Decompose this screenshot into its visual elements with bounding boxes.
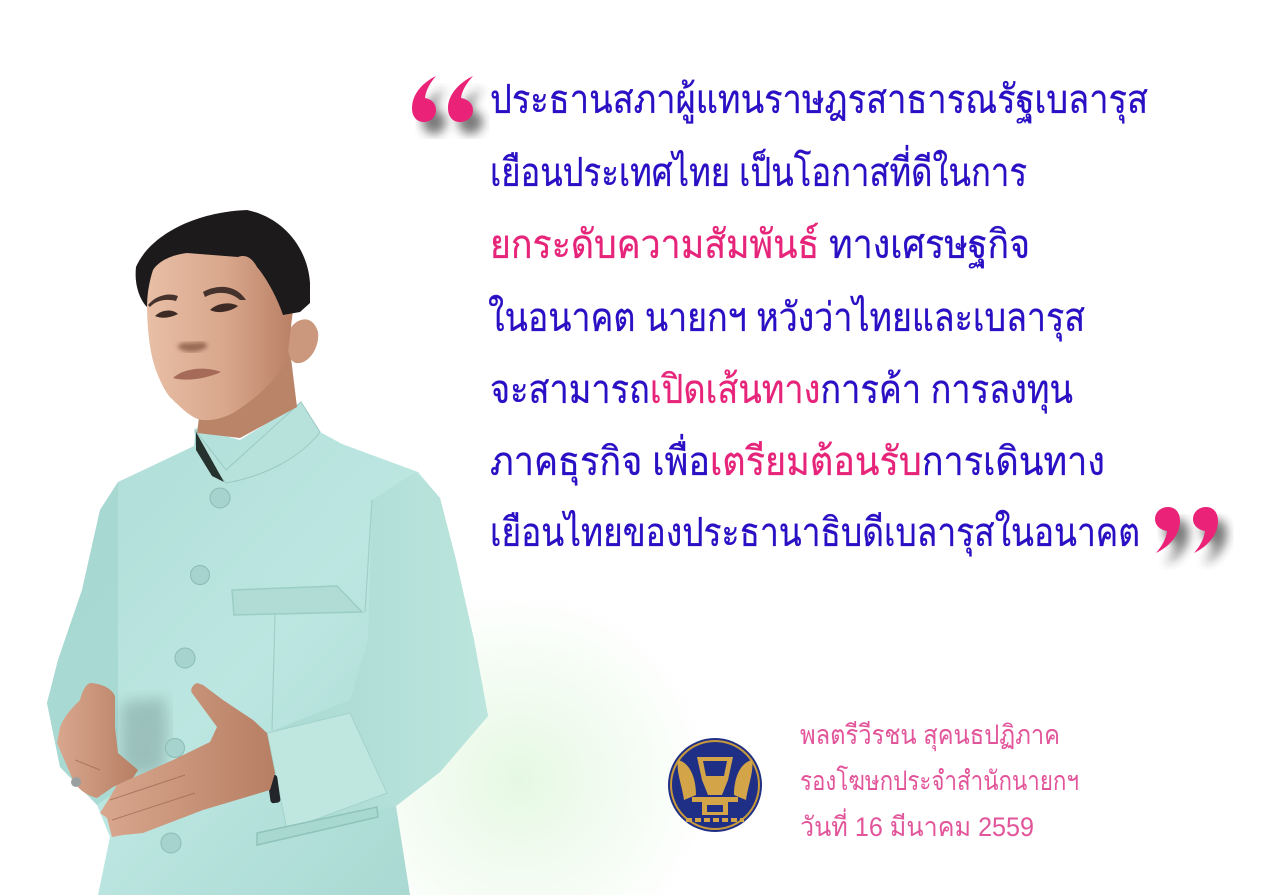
neck: [197, 350, 297, 438]
right hand: [100, 683, 275, 837]
finger lines: [75, 760, 195, 820]
ring: [71, 777, 81, 787]
nose: [177, 342, 208, 352]
collar: [195, 402, 320, 483]
ear: [287, 319, 318, 363]
seal lions: [678, 760, 696, 800]
man in teal jacket: [47, 210, 488, 895]
right sleeve: [267, 472, 488, 830]
right eyebrow: [203, 287, 246, 300]
stomach shadow: [120, 698, 168, 778]
line 6: ภาคธุรกิจ เพื่อเตรียมต้อนรับการเดินทาง: [490, 434, 1105, 486]
buttons: [161, 488, 230, 853]
background glow: [300, 560, 740, 895]
opening quote shadow: [422, 88, 483, 134]
watch: [267, 774, 281, 804]
seal base: [692, 797, 738, 815]
pocket: [232, 586, 362, 615]
neck opening: [196, 432, 224, 482]
signature block: [800, 720, 1079, 842]
government seal: [668, 738, 762, 832]
jacket seam: [272, 500, 372, 730]
mouth: [173, 369, 221, 380]
closing quote shadow: [1164, 519, 1227, 565]
opening quote mark: [412, 76, 473, 122]
lower pocket: [257, 807, 378, 845]
jacket body: [47, 402, 488, 895]
date: วันที่ 16 มีนาคม 2559: [800, 808, 1034, 842]
line 4: ในอนาคต นายกฯ หวังว่าไทยและเบลารุส: [488, 294, 1085, 342]
position: รองโฆษกประจำสำนักนายกฯ: [800, 766, 1079, 796]
left eyebrow: [148, 294, 178, 307]
line 2: เยือนประเทศไทย เป็นโอกาสที่ดีในการ: [490, 145, 1027, 195]
left hand: [57, 683, 138, 798]
line 7: เยือนไทยของประธานาธิบดีเบลารุสในอนาคต: [490, 509, 1140, 557]
right cuff: [267, 713, 387, 830]
eyes: [155, 310, 178, 318]
quote text: [488, 78, 1148, 557]
face: [147, 235, 293, 420]
seal centre bowl: [697, 757, 733, 795]
hair: [136, 210, 310, 315]
seal bottom band: [686, 818, 744, 822]
line 5: จะสามารถเปิดเส้นทางการค้า การลงทุน: [490, 368, 1073, 414]
name: พลตรีวีรชน สุคนธปฏิภาค: [800, 720, 1060, 752]
line 3: ยกระดับความสัมพันธ์ ทางเศรษฐกิจ: [490, 222, 1030, 269]
line 1: ประธานสภาผู้แทนราษฎรสาธารณรัฐเบลารุส: [490, 78, 1148, 124]
left sleeve shade: [47, 482, 118, 805]
closing quote mark: [1155, 507, 1218, 553]
